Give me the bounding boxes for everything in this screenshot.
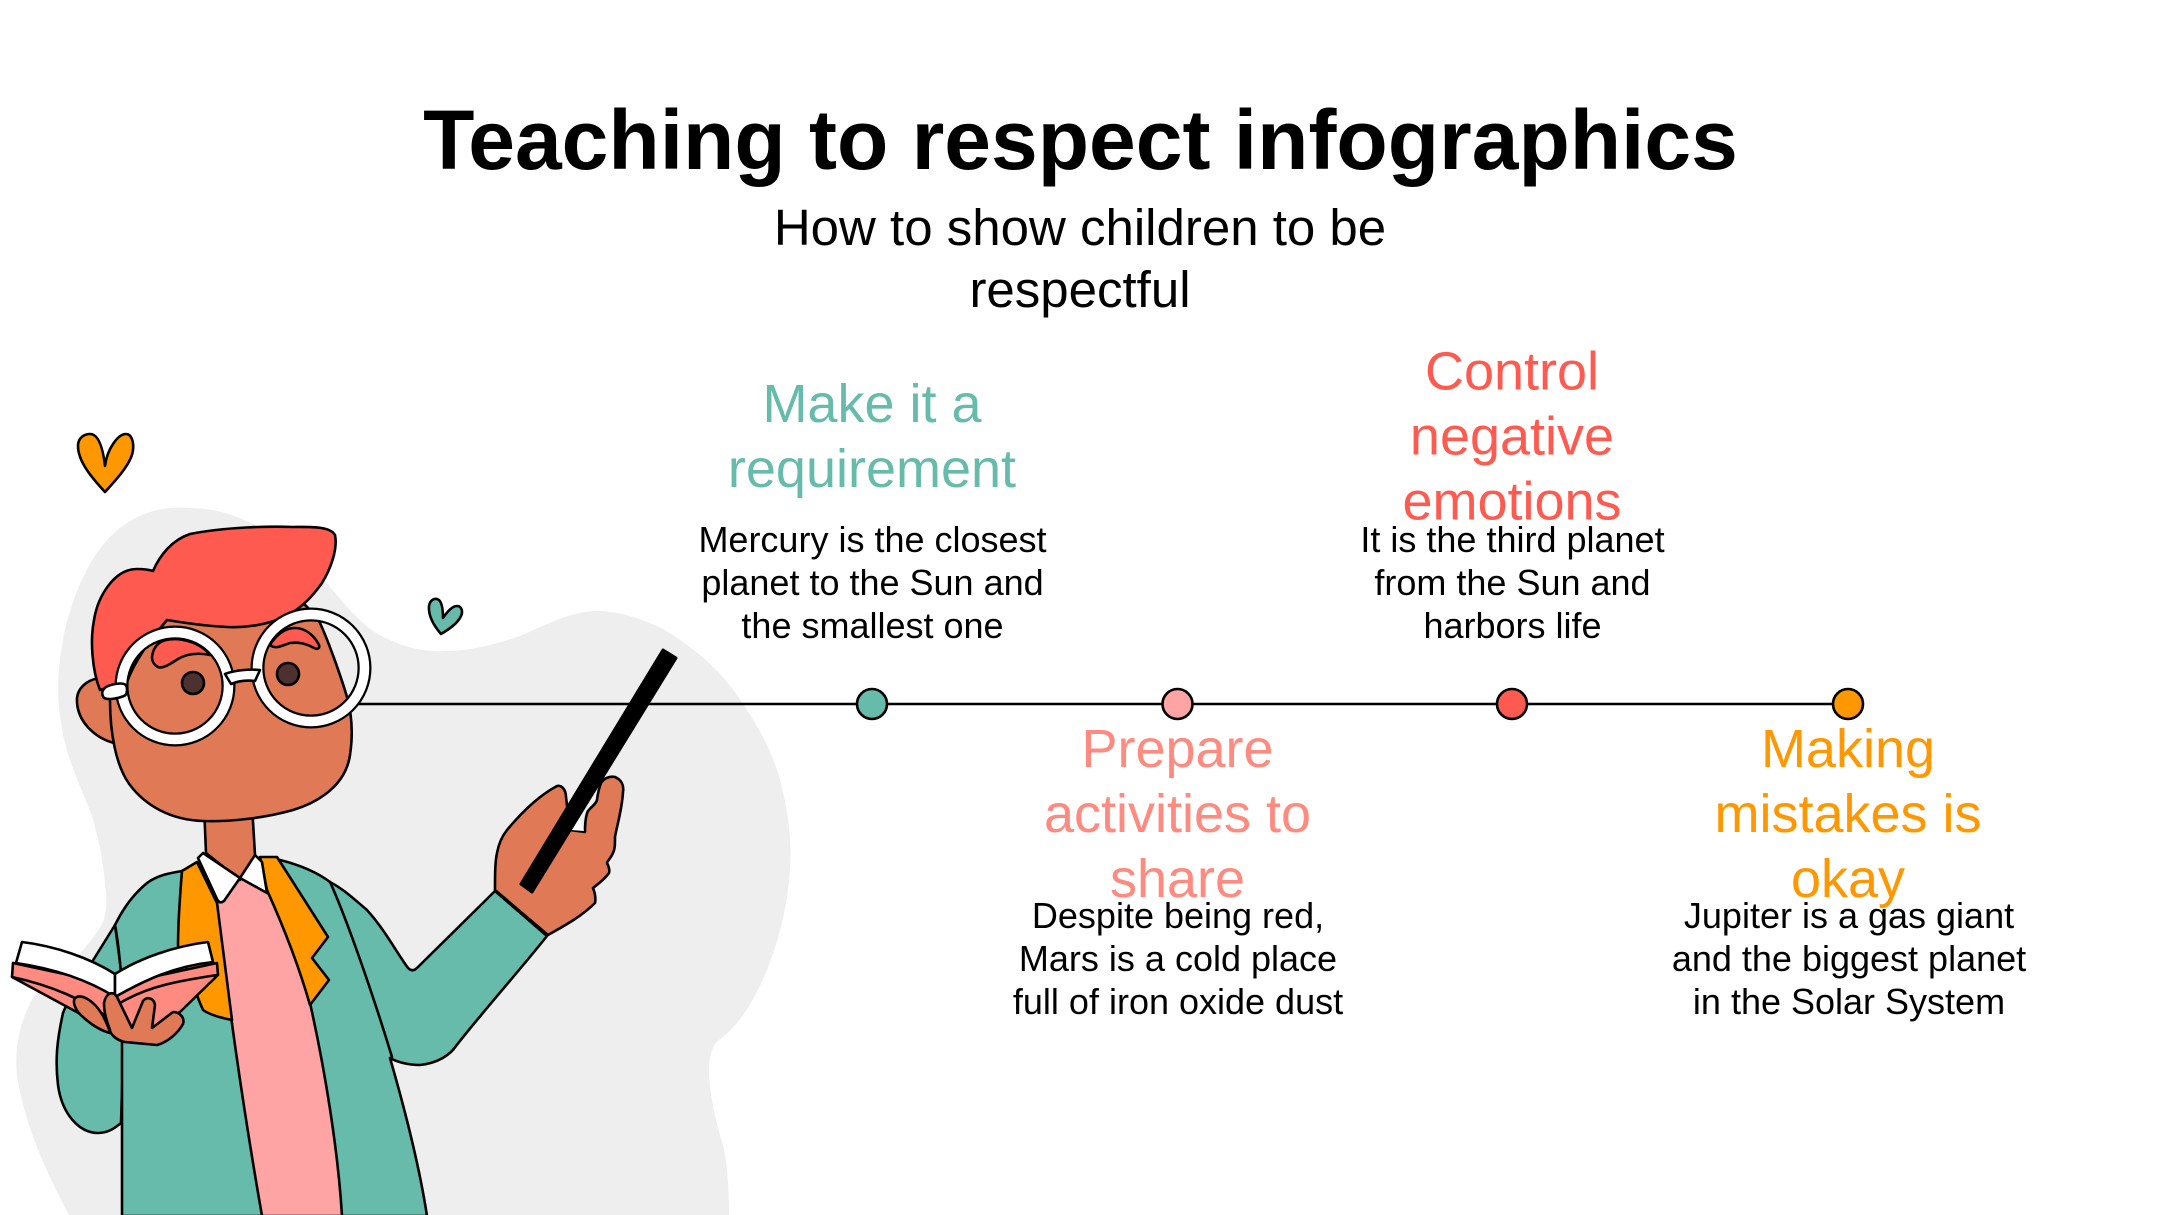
step 4 heading: Making (1761, 719, 1935, 779)
left orange lapel (178, 862, 232, 1020)
ear (77, 678, 118, 743)
step 3 heading: Control (1425, 342, 1599, 402)
open book (12, 942, 218, 1030)
right orange lapel (260, 857, 329, 1005)
left eyebrow (152, 639, 210, 667)
step 4 heading: okay (1791, 849, 1905, 909)
round glasses (102, 614, 364, 740)
step 1 heading (728, 374, 1016, 499)
step 2 heading: Prepare (1081, 719, 1274, 779)
step 2 description: Mars is a cold place (1019, 938, 1337, 979)
subtitle (774, 199, 1386, 318)
left eye (182, 672, 204, 694)
step 2 description (1013, 895, 1343, 1022)
subtitle: respectful (969, 261, 1191, 318)
step 4 marker (1833, 689, 1863, 719)
step 1 heading: Make it a (762, 374, 983, 434)
icon: teal heart (429, 599, 462, 634)
jacket sleeve seam (330, 882, 392, 1057)
step 1 description (698, 519, 1047, 646)
step 4 description: in the Solar System (1693, 981, 2005, 1022)
step 2 marker (1162, 689, 1192, 719)
notch between fingers (571, 815, 584, 831)
right eye (277, 663, 299, 685)
teacher jacket (115, 860, 547, 1215)
step 3 description: from the Sun and (1374, 562, 1651, 603)
step 2 heading (1044, 719, 1311, 909)
pointer stick (521, 650, 676, 892)
pink shirt (217, 878, 342, 1215)
face (110, 603, 352, 821)
subtitle: How to show children to be (774, 199, 1386, 256)
grey background blob (16, 507, 791, 1215)
step 3 heading: negative (1410, 406, 1614, 466)
step 4: making mistakes is okay (1672, 689, 2026, 1022)
step 4 heading (1714, 719, 1982, 909)
step 4 description: and the biggest planet (1672, 938, 2026, 979)
timeline axis line (340, 703, 1848, 705)
step 3 heading (1402, 342, 1622, 532)
step 4 description: Jupiter is a gas giant (1684, 895, 2014, 936)
step 1 description: planet to the Sun and (701, 562, 1044, 603)
step 4 heading: mistakes is (1714, 784, 1982, 844)
step 1 heading: requirement (728, 439, 1016, 499)
step 3 description (1360, 519, 1665, 646)
step 4 description (1672, 895, 2026, 1022)
step 1 description: the smallest one (741, 605, 1004, 646)
neck (204, 805, 255, 880)
right hand (495, 777, 623, 935)
white shirt collar (198, 853, 267, 902)
illustration: teacher (12, 527, 676, 1215)
step 3 description: It is the third planet (1360, 519, 1665, 560)
step 2 description: Despite being red, (1032, 895, 1324, 936)
step 3 description: harbors life (1423, 605, 1602, 646)
step 3: control negative emotions (1360, 342, 1665, 719)
hair (92, 527, 336, 690)
step 3 marker (1497, 689, 1527, 719)
teacher left arm sleeve (57, 925, 125, 1133)
icon: orange heart (78, 434, 133, 492)
right eyebrow (270, 628, 319, 649)
step 1 description: Mercury is the closest (698, 519, 1047, 560)
step 3 heading: emotions (1402, 472, 1622, 532)
step 2 description: full of iron oxide dust (1013, 981, 1343, 1022)
step 2 heading: share (1110, 849, 1245, 909)
title: Teaching to respect infographics (423, 93, 1738, 187)
step 1: make it a requirement (698, 374, 1047, 719)
hand holding book (74, 993, 183, 1045)
step 2: prepare activities to share (1013, 689, 1343, 1022)
step 2 heading: activities to (1044, 784, 1311, 844)
step 1 marker (857, 689, 887, 719)
